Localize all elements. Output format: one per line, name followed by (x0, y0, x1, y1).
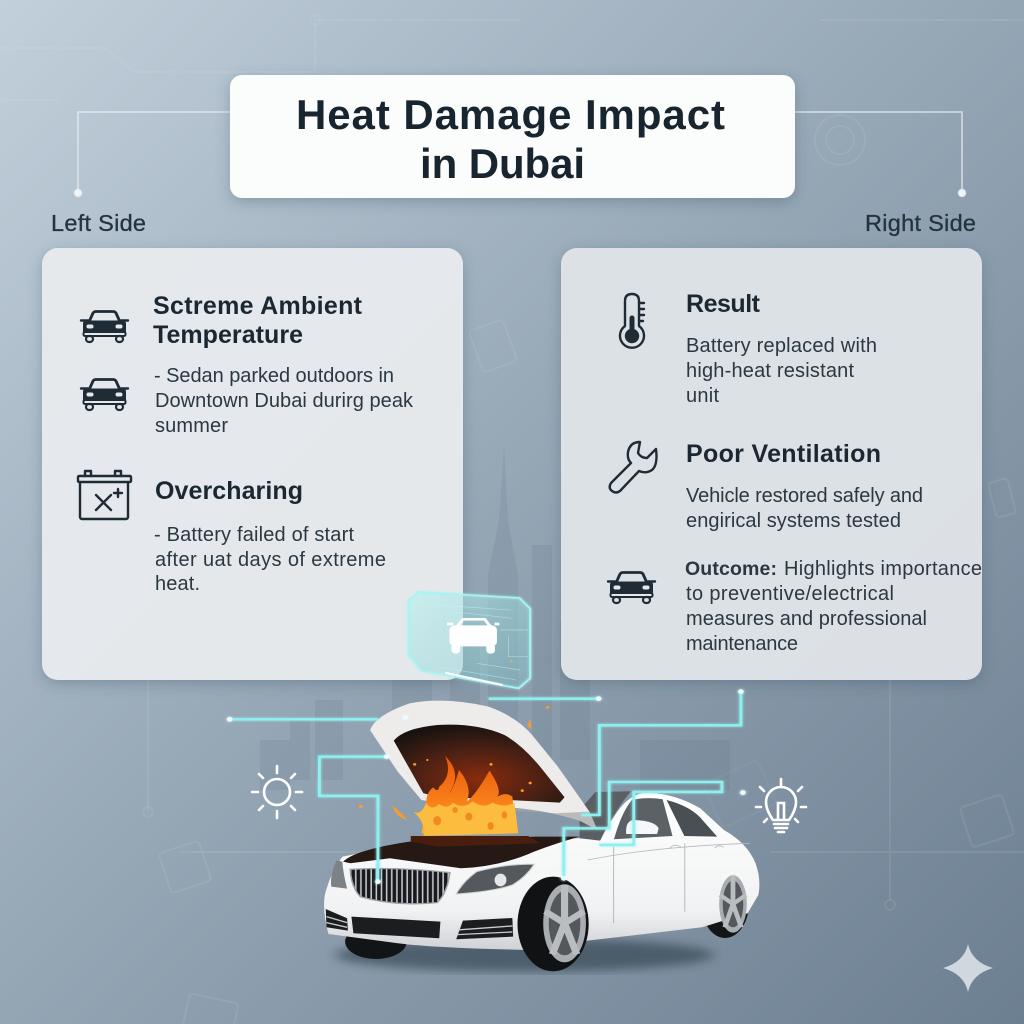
hood inner edge shading (421, 800, 597, 830)
heading: overcharging: Overcharing (155, 477, 303, 505)
text: sedan description (154, 365, 414, 437)
faint Dubai skyline (260, 445, 730, 790)
car illustration with open burning hood (227, 592, 759, 972)
hologram base bar (445, 673, 502, 685)
heading: result: Result (686, 290, 761, 318)
battery block (411, 836, 540, 847)
lower intake (351, 917, 440, 938)
icon: wrench (610, 442, 656, 492)
text: outcome (685, 558, 982, 655)
faint battery icons (159, 319, 1016, 1024)
text: battery failure (154, 524, 386, 595)
heading: extreme ambient temperature: Sctreme Ambient (153, 292, 363, 320)
far front wheel (345, 924, 407, 959)
text: vehicle restored: engirical systems tested (686, 510, 901, 532)
text: outcome: to preventive/electrical (686, 583, 894, 605)
rear wheel tyre (701, 870, 749, 938)
left fog vent (326, 909, 348, 931)
teal circuit lines (227, 689, 746, 884)
icon: car second (81, 380, 128, 410)
engine bay (343, 837, 580, 868)
text: battery failure: - Battery failed of start (154, 524, 354, 546)
text: battery failure: heat. (155, 573, 200, 595)
icon: sun (252, 766, 302, 818)
text: battery replaced (686, 335, 877, 407)
heading: poor ventilation: Poor Ventilation (686, 440, 881, 468)
text: battery replaced: unit (686, 385, 719, 407)
hologram car icon (447, 619, 499, 652)
door details (587, 843, 750, 923)
car body (324, 793, 759, 950)
car shadow (334, 938, 714, 972)
heading: extreme ambient temperature: Temperature (153, 321, 303, 349)
panel: left causes (42, 248, 463, 680)
icon: light bulb (756, 779, 806, 832)
door mirror (626, 820, 659, 834)
title card: in Dubai (420, 140, 585, 187)
text: battery replaced: Battery replaced with (686, 335, 877, 357)
icon: sparkle star (943, 944, 993, 992)
text: outcome: Highlights importance (784, 558, 982, 580)
text: sedan description: Downtown Dubai durirg peak (155, 390, 414, 412)
title card: Heat Damage Impact (296, 91, 725, 138)
holographic panel (409, 592, 530, 688)
text: sedan description: - Sedan parked outdoors in (154, 365, 394, 387)
open hood (370, 701, 597, 830)
text: battery replaced: high-heat resistant (686, 360, 854, 382)
rear wheel rim (719, 875, 747, 933)
hood dark underside (394, 725, 565, 803)
title card (230, 75, 795, 198)
right headlight (456, 864, 534, 894)
label: right side: Right Side (865, 210, 976, 236)
flames back (421, 756, 516, 833)
front wheel (518, 877, 589, 971)
panel: right results (561, 248, 982, 680)
side windows (614, 798, 717, 839)
flame embers (359, 660, 549, 820)
title connector lines (74, 112, 966, 196)
windshield (580, 791, 631, 841)
label: left side: Left Side (51, 210, 146, 236)
grille (350, 868, 450, 904)
heading: extreme ambient temperature (153, 292, 363, 349)
hologram data lines (437, 605, 528, 680)
icon: car top (81, 312, 128, 342)
flames front (414, 801, 518, 836)
right fog vent (456, 918, 513, 939)
text: battery failure: after uat days of extreme (155, 549, 386, 571)
text: sedan description: summer (155, 415, 228, 437)
text: vehicle restored: Vehicle restored safely and (686, 485, 923, 507)
headlight lens (495, 874, 506, 886)
icon: car outcome (608, 572, 655, 603)
flame mottling (433, 807, 507, 830)
icon: battery (78, 471, 131, 519)
left headlight (331, 861, 347, 889)
text: outcome: Outcome: (685, 558, 777, 580)
text: outcome: maintenance (686, 633, 798, 655)
icon: thermometer (620, 294, 644, 348)
text: vehicle restored (686, 485, 923, 532)
text: outcome: measures and professional (686, 608, 927, 630)
